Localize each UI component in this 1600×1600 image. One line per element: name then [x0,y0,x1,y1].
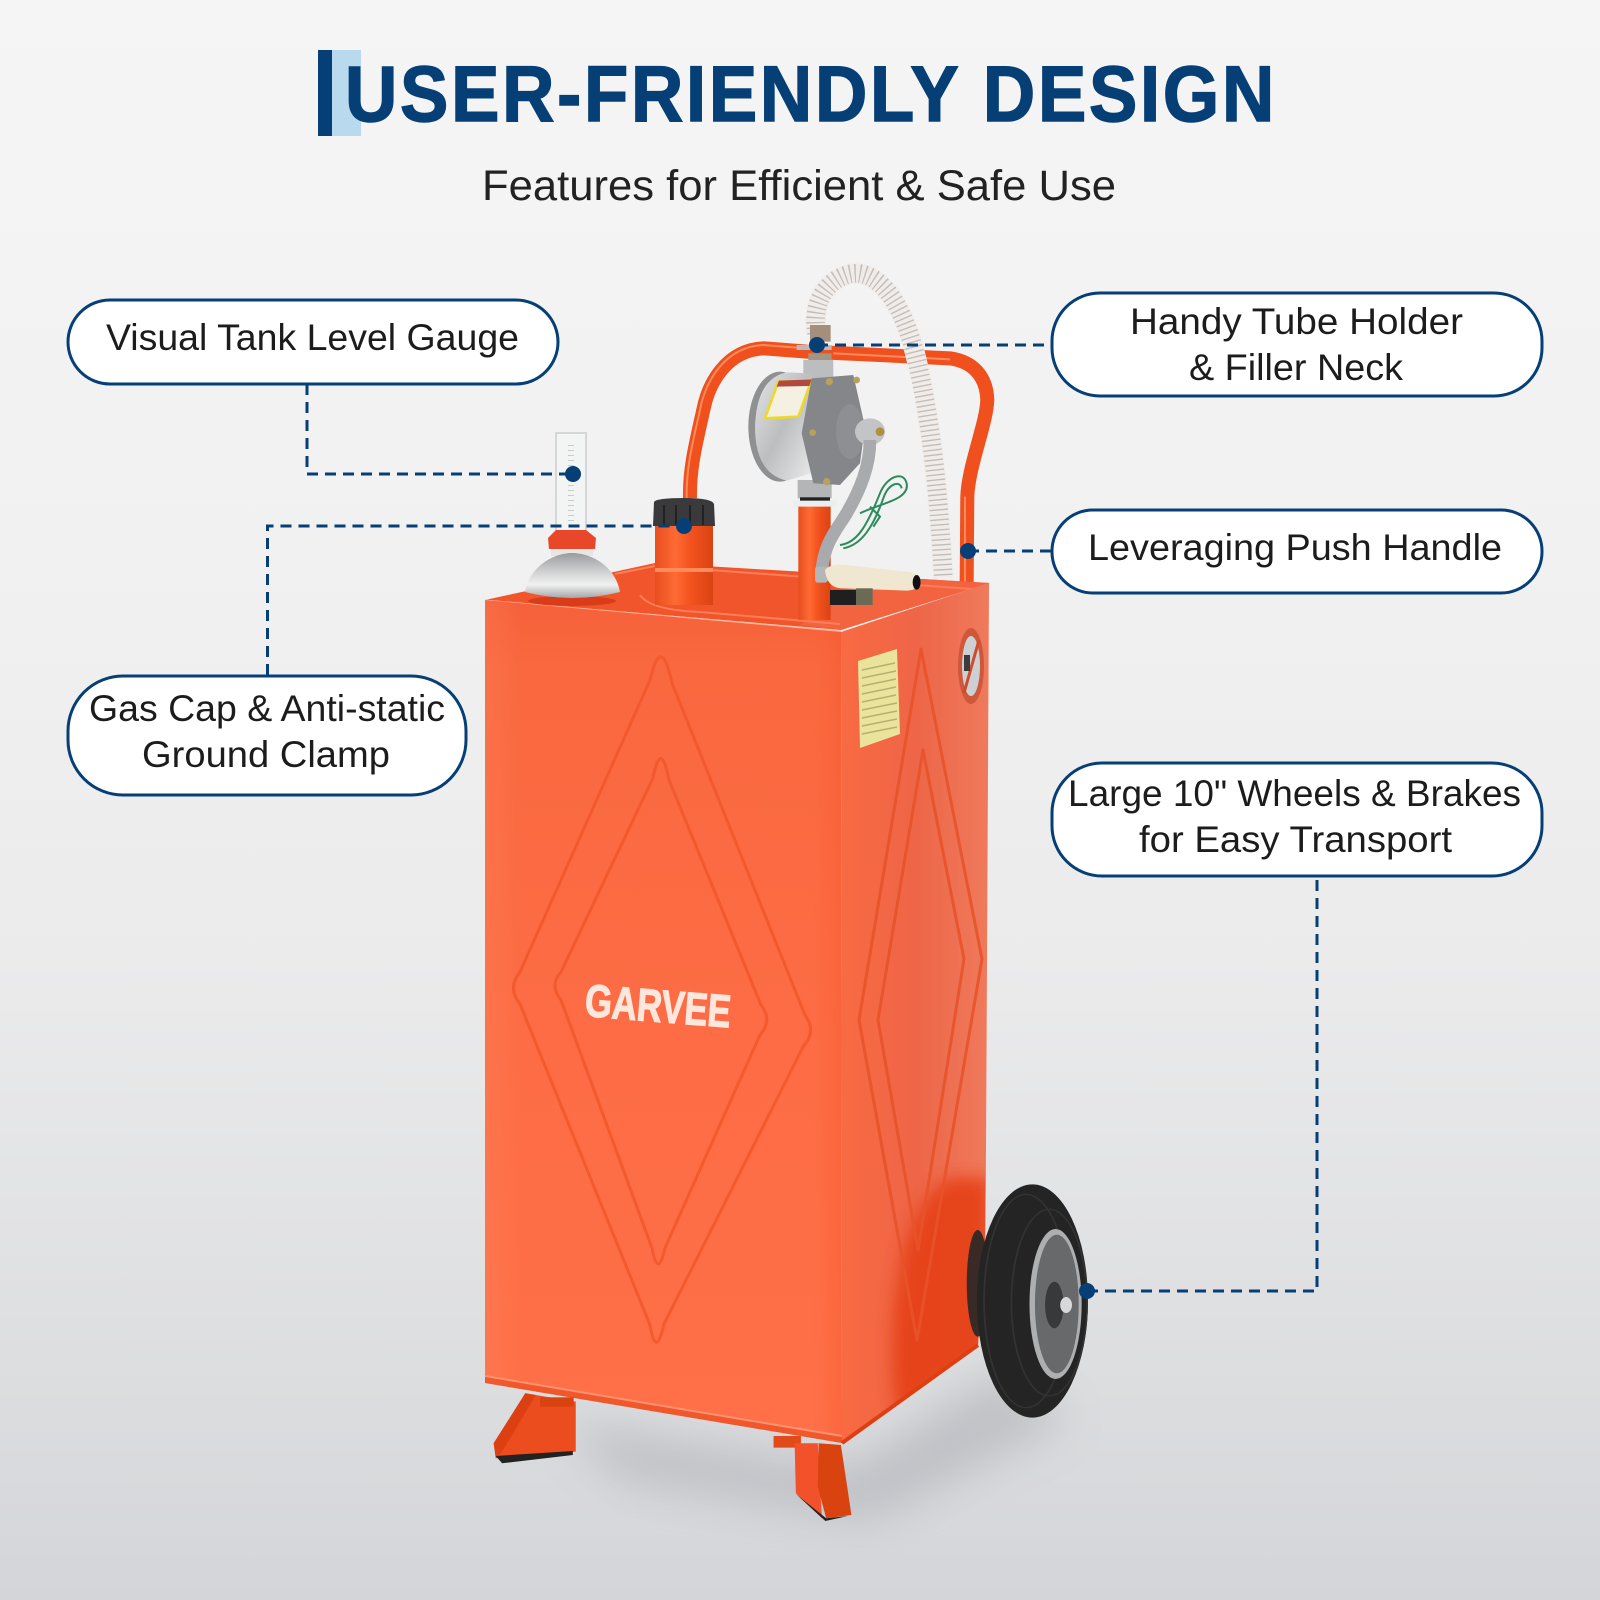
lower neck and collar [793,480,837,507]
tank side face [841,583,990,1443]
pump drum [748,372,812,482]
callout: wheels and brakes: for Easy Transport [1139,819,1453,860]
brass hose fitting [797,325,832,361]
ground shadow [560,1370,1070,1520]
brand logo: GARVEE [583,974,733,1037]
left foot [494,1393,576,1463]
leader: push handle [960,543,1051,559]
tank top face [485,563,990,632]
callout: visual tank level gauge [68,300,558,384]
embossed diamonds, side [859,649,982,1340]
handle [687,345,987,587]
crank arm [822,440,870,573]
callout: tube holder and filler neck [1052,293,1542,396]
callout: gas cap and clamp [68,676,466,795]
wheel [967,1184,1088,1418]
gas cap and filler [653,498,715,605]
pump assembly [748,325,921,620]
callout: gas cap and clamp: Ground Clamp [142,734,390,775]
callout: tube holder and filler neck: Handy Tube Holder [1130,301,1463,342]
embossed diamonds, front [514,657,811,1342]
leader: gas cap [268,518,692,675]
leader: level gauge [307,384,581,482]
title accent bar [318,50,361,136]
callout: push handle: Leveraging Push Handle [1088,527,1502,568]
callout: tube holder and filler neck: & Filler Neck [1189,347,1404,388]
leader: tube holder [809,337,1051,353]
callout: wheels and brakes [1052,763,1542,876]
tank front face [485,600,842,1443]
leader: wheels [1079,876,1317,1299]
warning label [858,649,900,748]
diaphragm housing [802,375,885,485]
callout: visual tank level gauge: Visual Tank Level Gauge [106,317,519,358]
product: fuel caddy [485,273,1088,1521]
orange pipe [798,507,831,620]
subtitle: Features for Efficient & Safe Use [482,162,1116,210]
level gauge [525,433,620,606]
ground wires [840,476,907,548]
hose [816,273,943,578]
wood grip [815,565,921,591]
callout: push handle [1052,510,1542,593]
callout: gas cap and clamp: Gas Cap & Anti-static [89,688,445,729]
callout: wheels and brakes: Large 10" Wheels & Brakes [1068,773,1521,814]
ground clamp [830,588,873,605]
title: USER-FRIENDLY DESIGN [345,49,1277,138]
pump neck [803,360,833,380]
no-fire sticker [958,628,984,704]
right foot [774,1436,851,1521]
